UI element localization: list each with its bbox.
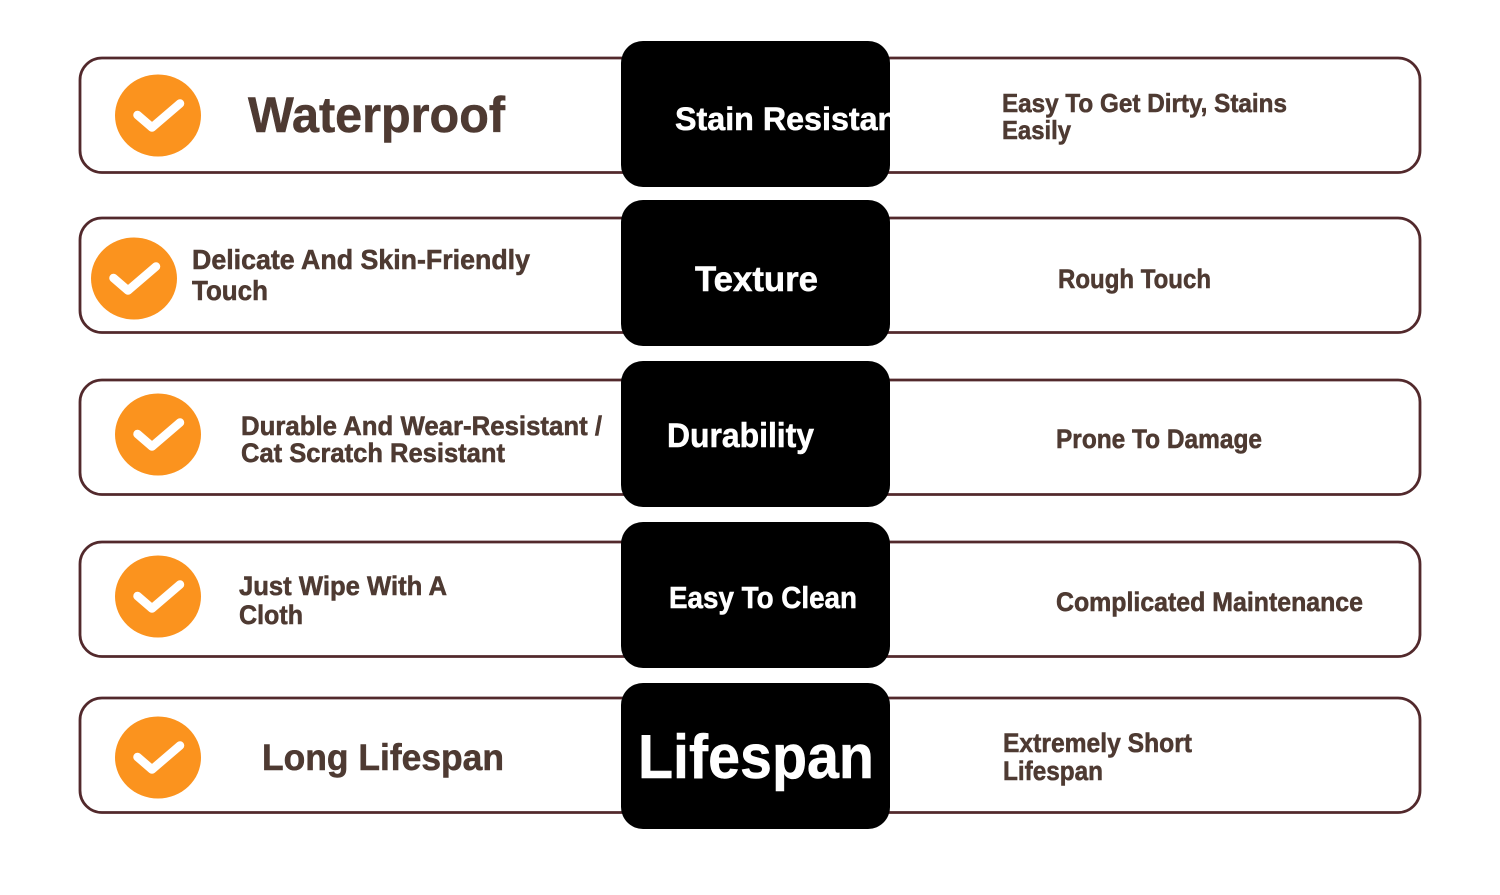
row 2 left text: Delicate And Skin-Friendly bbox=[192, 244, 530, 275]
row 4 center category: Easy To Clean bbox=[669, 580, 857, 615]
row 3 left text: Durable And Wear-Resistant / bbox=[241, 411, 602, 441]
row 2 left text: Touch bbox=[192, 275, 268, 306]
row 5 center category bbox=[621, 683, 890, 829]
row 2 center category: Texture bbox=[695, 260, 818, 299]
row 5: lifespan bbox=[80, 683, 1420, 829]
row 3 left text: Cat Scratch Resistant bbox=[241, 438, 505, 468]
row 5 outline panel bbox=[80, 698, 1420, 812]
row 4 center category bbox=[621, 522, 890, 668]
row 3 check icon bbox=[115, 394, 201, 476]
row 2 left text bbox=[192, 244, 530, 306]
row 2: texture bbox=[80, 200, 1420, 346]
row 1 left text: Waterproof bbox=[248, 87, 505, 143]
row 3 outline panel bbox=[80, 380, 1420, 494]
row 2 right text: Rough Touch bbox=[1058, 264, 1211, 294]
row 5 right text bbox=[1003, 728, 1192, 786]
row 1 center category bbox=[621, 41, 908, 187]
row 4 outline panel bbox=[80, 542, 1420, 656]
row 3 center category: Durability bbox=[667, 417, 814, 455]
row 4 right text: Complicated Maintenance bbox=[1056, 587, 1363, 617]
row 5 check icon bbox=[115, 716, 201, 798]
row 1 right text bbox=[1002, 88, 1287, 145]
row 4 check icon bbox=[115, 556, 201, 638]
row 4 left text: Just Wipe With A bbox=[239, 571, 447, 601]
row 5 right text: Extremely Short bbox=[1003, 728, 1192, 758]
row 5 right text: Lifespan bbox=[1003, 756, 1103, 786]
row 5 left text: Long Lifespan bbox=[262, 737, 504, 778]
row 1 right text: Easily bbox=[1002, 115, 1071, 145]
row 2 center category bbox=[621, 200, 890, 346]
row 1 center category: Stain Resistant bbox=[675, 101, 908, 137]
row 3 left text bbox=[241, 411, 602, 468]
row 1 outline panel bbox=[80, 58, 1420, 172]
row 1 right text: Easy To Get Dirty, Stains bbox=[1002, 88, 1287, 118]
row 4 left text bbox=[239, 571, 447, 630]
row 3 right text: Prone To Damage bbox=[1056, 424, 1262, 454]
row 2 check icon bbox=[91, 238, 177, 320]
row 4: easy to clean bbox=[80, 522, 1420, 668]
row 3: durability bbox=[80, 361, 1420, 507]
row 1 check icon bbox=[115, 74, 201, 156]
row 2 outline panel bbox=[80, 218, 1420, 332]
row 1: stain resistance bbox=[80, 41, 1420, 187]
row 4 left text: Cloth bbox=[239, 600, 303, 630]
row 5 center category: Lifespan bbox=[638, 723, 874, 792]
row 3 center category bbox=[621, 361, 890, 507]
